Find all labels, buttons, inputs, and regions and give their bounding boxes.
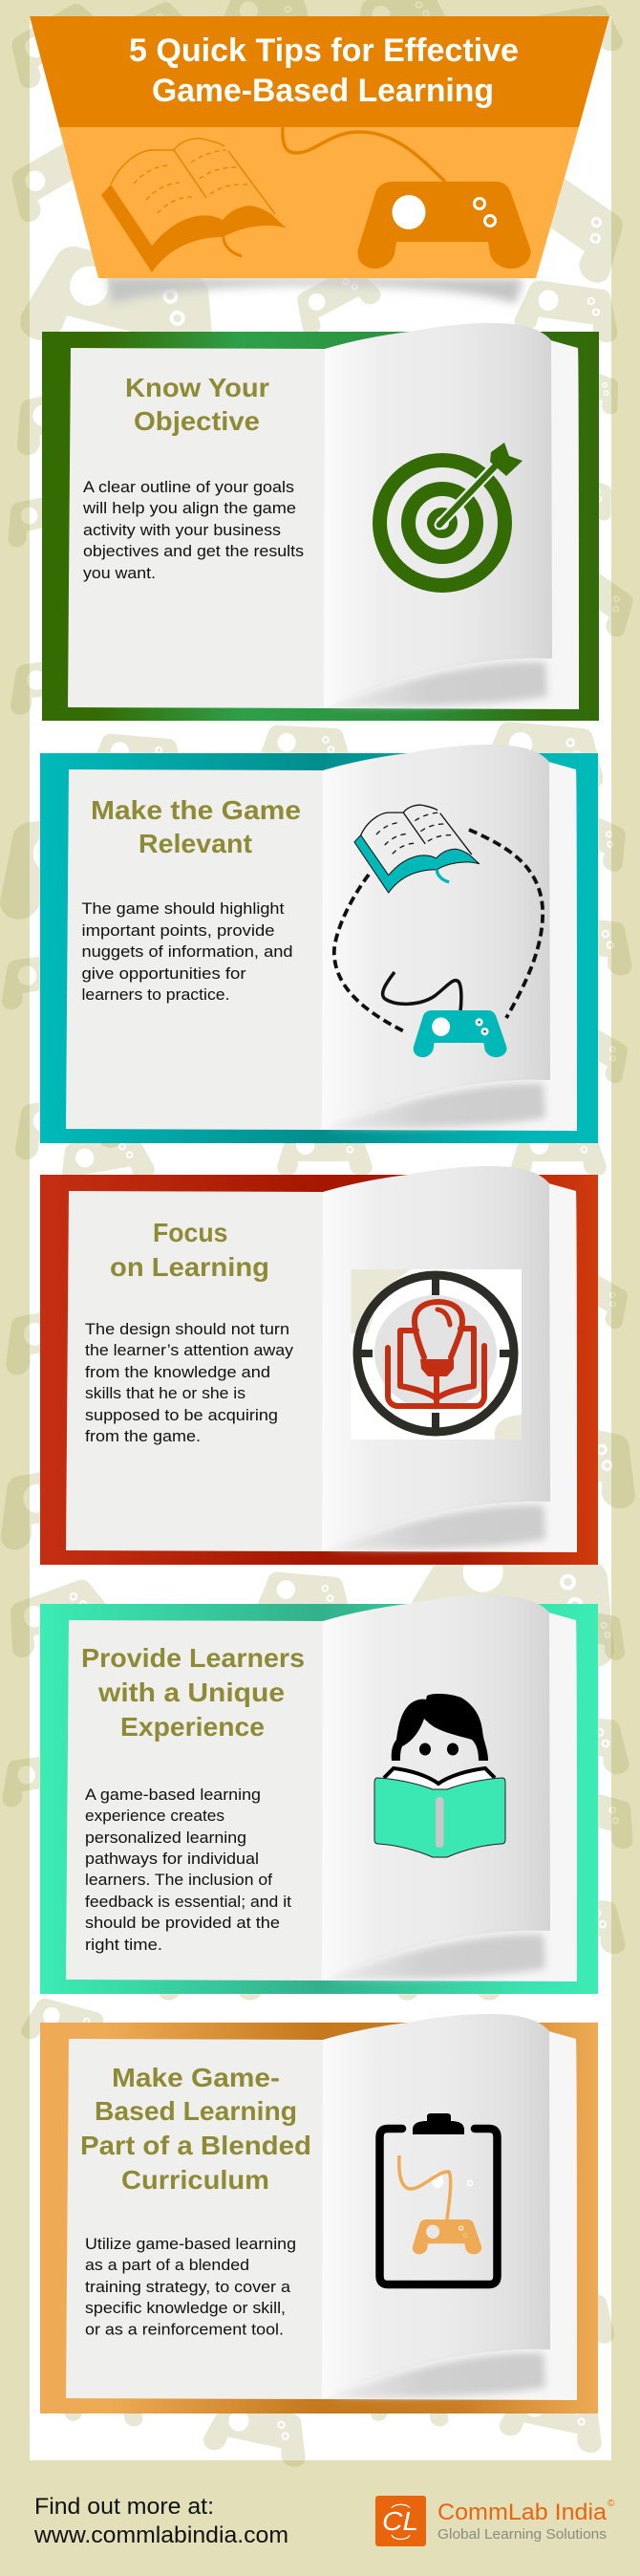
footer: find out more: Find out more at: [34, 2494, 214, 2520]
heading: tip 1: Know Your [125, 373, 269, 402]
icon: open book [101, 139, 287, 272]
text: tip 5: training strategy, to cover a [85, 2278, 291, 2296]
text: tip 5: specific knowledge or skill, [85, 2299, 286, 2317]
text: tip 3: skills that he or she is [85, 1384, 245, 1402]
footer: find out more: www.commlabindia.com [33, 2522, 288, 2548]
text: tip 2: The game should highlight [82, 899, 285, 918]
text: tip 1: will help you align the game [82, 499, 296, 517]
text: tip 4 [85, 1786, 291, 1954]
text: tip 2: give opportunities for [82, 964, 246, 983]
text: tip 5 [85, 2235, 296, 2338]
text: tip 4: personalized learning [85, 1829, 246, 1847]
heading: tip 4 [81, 1643, 305, 1742]
footer: find out more [33, 2494, 288, 2548]
heading: tip 5: Part of a Blended [80, 2131, 311, 2160]
text: tip 4: feedback is essential; and it [85, 1893, 291, 1911]
text: tip 3: from the knowledge and [85, 1363, 270, 1381]
heading: tip 3: Focus [153, 1218, 227, 1247]
heading: tip 4: Provide Learners [81, 1643, 305, 1673]
text: tip 1: objectives and get the results [83, 542, 304, 560]
heading: tip 2: Make the Game [91, 795, 301, 825]
text: tip 4: A game-based learning [85, 1786, 261, 1804]
logo: CommLab India: © [608, 2499, 615, 2509]
text: tip 1: activity with your business [83, 521, 281, 539]
text: tip 4: should be provided at the [85, 1914, 280, 1932]
heading: tip 3: on Learning [110, 1252, 269, 1282]
text: tip 5: Utilize game-based learning [85, 2235, 296, 2253]
heading: tip 5: Curriculum [121, 2165, 269, 2195]
panel: tip 5 blended curriculum [40, 2014, 598, 2414]
title: 5 Quick Tips for Effective [129, 32, 519, 69]
logo: CommLab India [375, 2496, 615, 2546]
text: tip 5: as a part of a blended [85, 2256, 249, 2274]
icon: game cable [283, 127, 445, 182]
heading: tip 3 [110, 1218, 269, 1282]
logo: CommLab India: Global Learning Solutions [437, 2526, 607, 2543]
heading: tip 4: Experience [120, 1712, 265, 1742]
text: tip 2: nuggets of information, and [82, 942, 292, 961]
text: tip 3: supposed to be acquiring [85, 1406, 278, 1424]
text: tip 2 [82, 899, 292, 1004]
heading: tip 1: Objective [134, 406, 260, 436]
icon: child reading a book [374, 1694, 505, 1857]
title: Game-Based Learning [152, 73, 494, 109]
logo: CommLab India: CL [382, 2506, 418, 2536]
text: tip 5: or as a reinforcement tool. [85, 2321, 284, 2338]
text: tip 2: learners to practice. [82, 985, 229, 1004]
text: tip 3: the learner’s attention away [85, 1341, 294, 1359]
logo: CommLab India: CommLab India [437, 2500, 608, 2525]
heading: tip 5 [80, 2063, 311, 2195]
header banner [30, 16, 609, 304]
heading: tip 2 [91, 795, 301, 858]
heading: tip 5: Make Game- [112, 2063, 280, 2092]
text: tip 3: The design should not turn [85, 1320, 289, 1338]
icon: book and controller loop [334, 805, 543, 1057]
icon: game controller [357, 182, 530, 269]
heading: tip 2: Relevant [139, 829, 252, 858]
text: tip 4: pathways for individual [85, 1850, 259, 1868]
panel: tip 2 make the game relevant [40, 745, 598, 1143]
heading: tip 1 [125, 373, 269, 436]
icon: target with arrow [380, 443, 523, 585]
text: tip 3 [85, 1320, 294, 1445]
heading: tip 4: with a Unique [97, 1678, 285, 1707]
text: tip 3: from the game. [85, 1427, 201, 1445]
icon: focus crosshair with bulb and book [352, 1269, 522, 1440]
icon: clipboard with controller [380, 2113, 497, 2284]
text: tip 4: experience creates [85, 1807, 224, 1825]
text: tip 4: learners. The inclusion of [85, 1871, 272, 1889]
text: tip 1 [82, 478, 304, 582]
panel: tip 3 focus on learning [40, 1166, 598, 1565]
text: tip 4: right time. [85, 1936, 162, 1954]
heading: tip 5: Based Learning [95, 2096, 297, 2126]
text: tip 2: important points, provide [82, 921, 275, 940]
panel: tip 4 unique experience [40, 1595, 598, 1994]
text: tip 1: A clear outline of your goals [83, 478, 294, 496]
text: tip 1: you want. [83, 564, 156, 582]
title [129, 32, 519, 109]
panel: tip 1 know your objective [42, 323, 599, 721]
